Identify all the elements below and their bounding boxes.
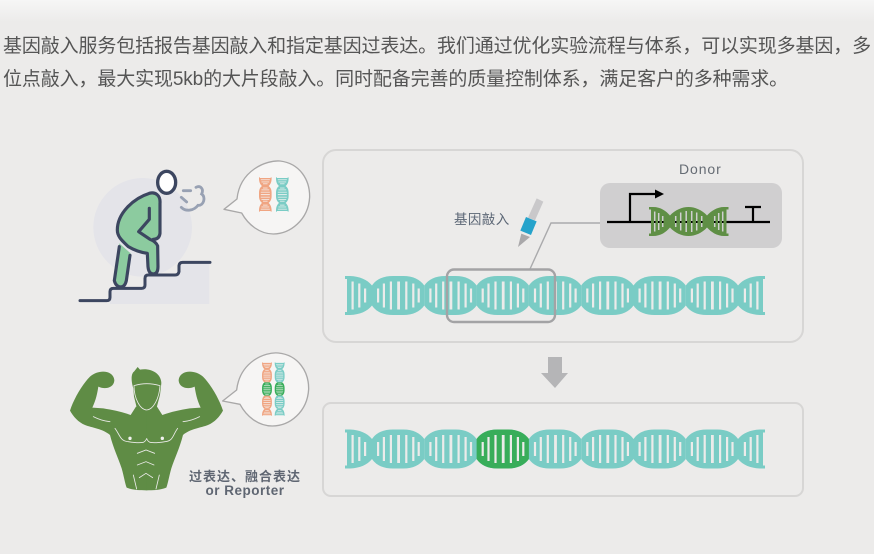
- modified DNA pair: [262, 362, 285, 416]
- caption: or Reporter: or Reporter: [205, 483, 285, 498]
- promoter arrow: [630, 194, 656, 222]
- muscle lines: [93, 384, 200, 489]
- intro text line 1: 基因敲入服务包括报告基因敲入和指定基因过表达。我们通过优化实验流程与体系，可以实现多基因，多: [3, 36, 871, 57]
- selection box: [447, 270, 555, 322]
- stairs: [80, 262, 210, 301]
- DNA strand bottom: [345, 430, 765, 468]
- breath puff: [181, 187, 204, 210]
- terminator: [745, 207, 761, 222]
- mini DNA pair: [259, 177, 289, 212]
- black baseline: [607, 221, 770, 223]
- panel: result: [323, 403, 803, 496]
- connector line: [530, 223, 600, 269]
- donor box: [600, 183, 782, 248]
- panel: gene knock-in: [323, 150, 803, 342]
- caption: overexpression: 过表达、融合表达: [189, 469, 301, 484]
- DNA strand top: [345, 276, 765, 315]
- icon: scalpel: [518, 198, 543, 247]
- torso and front leg: [117, 193, 160, 274]
- label: Donor: Donor: [679, 161, 722, 177]
- top shading: [0, 0, 874, 22]
- arrow down: [541, 357, 568, 388]
- icon: climbing person: [80, 161, 310, 304]
- head: [158, 171, 176, 193]
- inserted green segment: [477, 430, 529, 468]
- back leg: [114, 243, 131, 287]
- speech bubble: [224, 161, 310, 234]
- label: knock-in: 基因敲入: [454, 211, 510, 227]
- intro text line 2: 位点敲入，最大实现5kb的大片段敲入。同时配备完善的质量控制体系，满足客户的多种需求。: [3, 69, 788, 90]
- donor DNA: [649, 207, 728, 236]
- icon: muscular figure: [70, 353, 309, 490]
- speech bubble: [223, 353, 309, 426]
